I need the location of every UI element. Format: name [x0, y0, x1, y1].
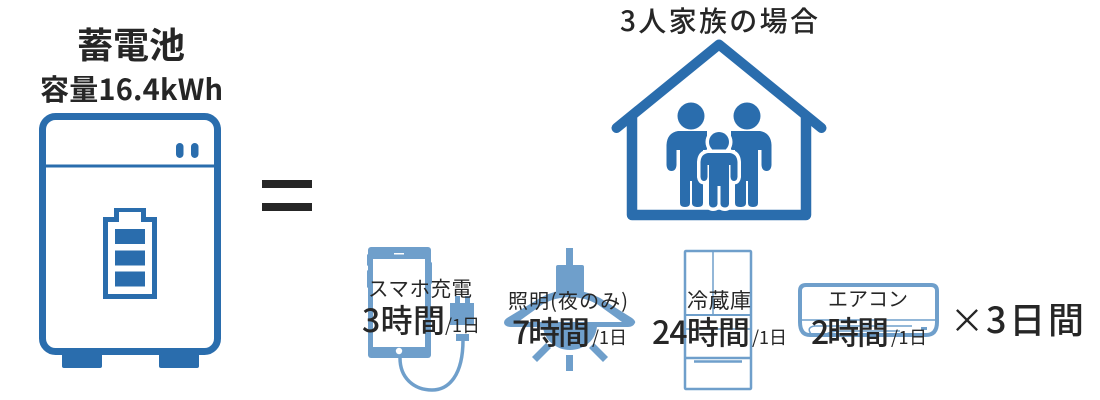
air conditioner label: /1日 [891, 324, 927, 350]
icon: storage battery unit [42, 116, 218, 368]
lighting label: 7時間 [512, 308, 590, 354]
icon: ceiling light [504, 248, 635, 371]
icon: air conditioner [800, 285, 937, 335]
air conditioner label: 2時間 [811, 308, 889, 354]
refrigerator label: 24時間 [652, 308, 750, 354]
phone charging label: スマホ充電 [368, 272, 472, 302]
refrigerator label [652, 285, 787, 354]
phone charging label [362, 272, 480, 342]
family heading: 3人家族の場合 [620, 0, 818, 40]
phone charging label: 3時間 [362, 296, 445, 342]
icon: house with family [616, 44, 822, 215]
icon: mother [731, 102, 772, 207]
refrigerator label: 冷蔵庫 [687, 285, 751, 315]
icon: child [700, 132, 738, 208]
multiplier: times three days: × [950, 294, 984, 343]
lighting label [508, 285, 628, 354]
air conditioner label: エアコン [828, 283, 908, 312]
icon: father [666, 102, 707, 207]
icon: smartphone with charger [367, 247, 474, 390]
lighting label: 照明(夜のみ) [508, 285, 628, 314]
battery heading: 蓄電池 [77, 17, 185, 69]
phone charging label: /1日 [445, 312, 480, 338]
equals sign [262, 180, 312, 211]
multiplier: times three days: 3日間 [986, 292, 1084, 344]
battery capacity: 容量16.4kWh [40, 67, 223, 109]
icon: refrigerator [685, 251, 751, 389]
lighting label: /1日 [592, 324, 627, 350]
air conditioner label [811, 283, 927, 354]
refrigerator label: /1日 [752, 324, 787, 350]
